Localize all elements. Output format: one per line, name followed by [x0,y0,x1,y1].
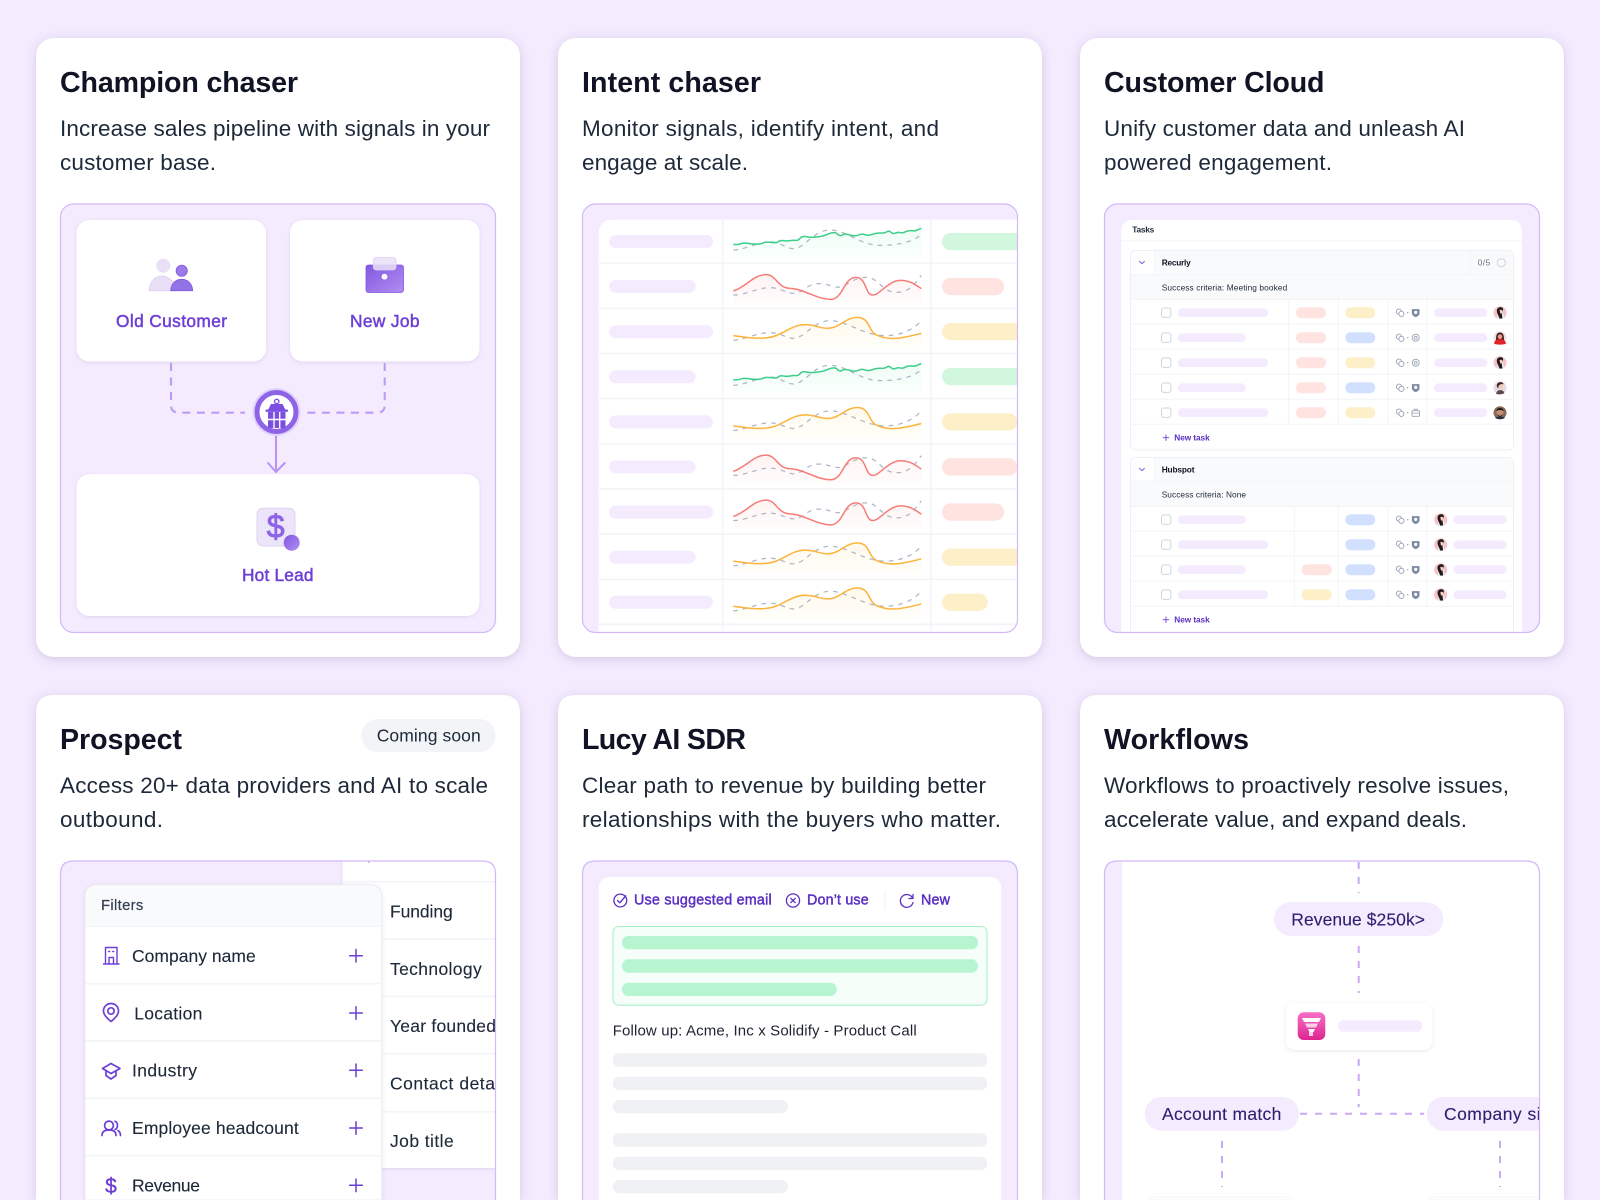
table: columns behind filters: Job title [390,1131,454,1151]
pill: Revenue: Revenue $250k> [1291,910,1425,930]
node: funnel step [1284,1010,1434,1052]
connector: dashed lines to hub [171,363,385,413]
description: Lucy AI SDR: relationships with the buyers who matter. [582,807,1001,832]
heading: Lucy AI SDR: Lucy AI SDR [582,724,746,756]
filters list: Filters [101,898,143,914]
icon: dollar tile: $ [267,508,285,544]
box: Old Customer [76,220,266,362]
filter: Revenue: $ [105,1175,117,1198]
filter: Industry [102,1062,363,1080]
table: columns behind filters: Contact details [390,1073,513,1093]
box: New Job [290,220,480,362]
group: Recurly: Success criteria: Meeting booked [1162,282,1288,292]
action: Use suggested email: Use suggested email [634,892,772,908]
description: Champion chaser: customer base. [60,150,216,175]
filter: Employee headcount: Employee headcount [132,1118,299,1138]
label: Hot Lead: Hot Lead [242,565,314,585]
filter: Revenue: Revenue [132,1176,200,1196]
card: Intent chaser [558,38,1042,657]
action: new task: New task [1174,432,1210,442]
icon: people [149,259,193,291]
icon: briefcase [366,258,404,292]
filter: Industry: Industry [132,1061,197,1081]
filter: Company name: Company name [132,946,256,966]
description: Intent chaser: Monitor signals, identify intent, and [582,116,939,141]
description: Prospect: outbound. [60,807,163,832]
group: Hubspot [1130,457,1514,632]
filters list [85,885,382,1200]
arrow: hub to Hot Lead [268,436,285,472]
heading: Intent chaser: Intent chaser [582,67,761,99]
task rows [1162,306,1506,419]
panel: workflow diagram [1104,860,1587,1200]
pill: Revenue [1274,902,1443,936]
action: Don't use: Don’t use [807,892,869,908]
filter: Company name [104,946,362,966]
email subject: Follow up: Acme, Inc x Solidify - Product Call [613,1022,917,1039]
pill: Account match [1145,1097,1299,1131]
pill: Account match: Account match [1162,1104,1281,1124]
icon: hub building [252,388,300,436]
action: New: New [921,892,951,908]
card: Champion chaser [36,38,520,657]
card: Lucy AI SDR [558,695,1042,1200]
description: Customer Cloud: powered engagement. [1104,150,1332,175]
table: columns behind filters: Funding [390,901,453,921]
group: Recurly: Recurly [1162,257,1191,267]
group: Recurly [1130,250,1514,450]
next nodes [1150,1197,1540,1200]
card: Workflows [1080,695,1587,1200]
badge: Coming soon: Coming soon [377,726,481,746]
label: New Job: New Job [350,311,420,331]
panel: intent table [582,204,1042,640]
action: new task [1162,616,1210,623]
label: Old Customer: Old Customer [116,311,227,331]
description: Prospect: Access 20+ data providers and AI to scale [60,773,488,798]
table: columns behind filters: Year founded [390,1016,496,1036]
icon: funnel [1298,1012,1325,1040]
panel: champion flow diagram [60,204,496,632]
panel: tasks list [1104,204,1540,658]
card: Customer Cloud [1080,38,1564,658]
status pills [942,233,1017,611]
badge: Coming soon [361,719,496,752]
heading: Prospect: Prospect [60,724,182,756]
table: columns behind filters: Technology [390,959,482,979]
panel: filters [60,860,513,1200]
filter: Location: Location [134,1003,202,1023]
description: Workflows: Workflows to proactively resolve issues, [1104,773,1509,798]
heading: Workflows: Workflows [1104,724,1249,756]
trend charts [733,228,921,619]
label: Tasks: Tasks [1132,225,1155,235]
panel: email suggestion [582,861,1018,1200]
action: new task [1162,434,1210,441]
filter: Employee headcount [101,1120,363,1138]
group: Recurly: 0/5 [1478,257,1491,267]
card: Prospect [36,695,520,1200]
description: Intent chaser: engage at scale. [582,150,748,175]
box: Hot Lead [76,474,480,616]
description: Champion chaser: Increase sales pipeline with signals in your [60,116,490,141]
email body skeleton [613,1053,987,1193]
description: Customer Cloud: Unify customer data and unleash AI [1104,116,1465,141]
action: New [900,892,951,908]
description: Workflows: accelerate value, and expand deals. [1104,807,1467,832]
task rows [1162,513,1507,601]
group: Hubspot: Hubspot [1162,464,1195,474]
table: columns behind filters [342,862,495,1170]
pill: Company size [1426,1097,1539,1131]
pill: Company size: Company size [1444,1104,1560,1124]
heading: Champion chaser: Champion chaser [60,67,298,99]
filter: Revenue [105,1176,363,1194]
row labels [609,235,713,609]
group: Hubspot: Success criteria: None [1162,489,1246,499]
heading: Customer Cloud: Customer Cloud [1104,67,1324,99]
description: Lucy AI SDR: Clear path to revenue by building better [582,773,986,798]
filter: Location [104,1003,362,1023]
action: new task: New task [1174,614,1210,624]
connector: dashed lines [1222,862,1500,1187]
suggestion box [613,926,987,1005]
icon: dollar tile [257,508,300,551]
